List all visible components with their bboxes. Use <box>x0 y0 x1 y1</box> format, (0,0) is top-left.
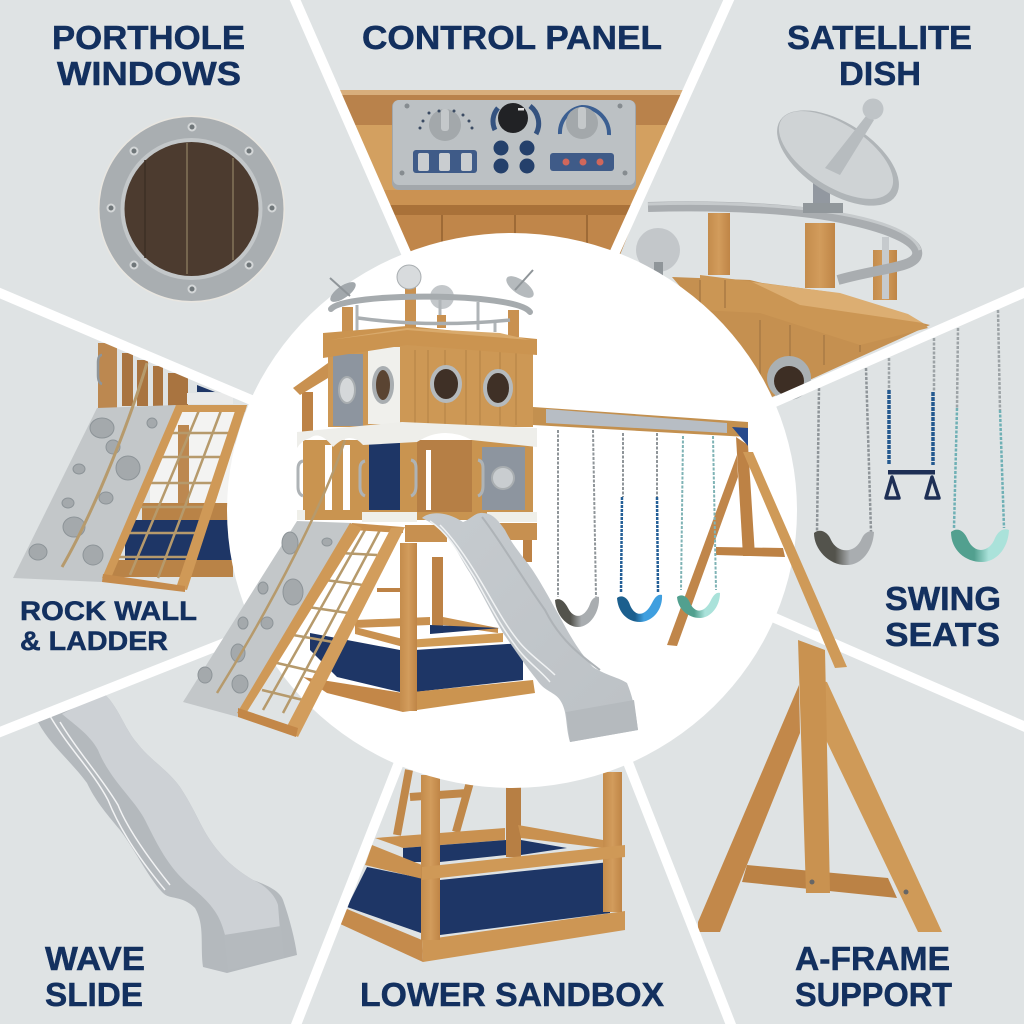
panel: a-frame support <box>698 640 952 1013</box>
rock wall <box>13 363 176 582</box>
heading: wave slide <box>45 940 145 1013</box>
heading: swing seats: SWING <box>885 580 1001 617</box>
center circle <box>227 233 797 788</box>
swing beam and a-frame <box>533 407 847 668</box>
heading: control panel: CONTROL PANEL <box>362 19 662 56</box>
trapeze bar <box>886 338 939 498</box>
heading: rock wall and ladder: & LADDER <box>20 626 168 656</box>
icon: control console <box>392 100 636 190</box>
heading: porthole windows: PORTHOLE <box>52 19 245 56</box>
swing 1 <box>555 430 599 627</box>
wood backing <box>338 90 686 260</box>
icon: slide <box>38 693 297 973</box>
heading: wave slide: WAVE <box>45 940 145 977</box>
net ladder <box>102 405 247 592</box>
posts and rail <box>648 203 920 300</box>
swing 3 <box>677 436 720 618</box>
heading: satellite dish <box>787 19 972 92</box>
heading: wave slide: SLIDE <box>45 976 143 1013</box>
icon: a-frame <box>698 640 942 932</box>
side roof <box>293 363 328 432</box>
swing 2 <box>617 433 662 622</box>
panel: lower sandbox <box>338 770 664 1013</box>
panel: satellite dish <box>636 19 972 400</box>
swing seat teal <box>951 310 1009 562</box>
tower behind wall <box>98 343 235 577</box>
heading: porthole windows: WINDOWS <box>57 55 241 92</box>
white band <box>297 422 537 448</box>
boat deck <box>672 275 930 398</box>
panel: rock wall and ladder <box>13 343 247 656</box>
playset illustration <box>183 265 847 742</box>
heading: a-frame support: SUPPORT <box>795 976 952 1013</box>
panel: wave slide <box>38 693 297 1013</box>
rock wall <box>183 440 352 717</box>
heading: swing seats: SEATS <box>885 616 1000 653</box>
heading: swing seats <box>885 580 1001 653</box>
panel: swing seats <box>814 310 1009 653</box>
sandbox and posts <box>303 523 537 712</box>
swing seat grey <box>814 368 874 565</box>
ball finial <box>636 228 680 278</box>
heading: lower sandbox: LOWER SANDBOX <box>360 976 664 1013</box>
porthole small <box>767 356 811 400</box>
cabin roof beam <box>323 326 537 358</box>
lower deck <box>297 440 537 522</box>
panel: control panel <box>338 19 686 260</box>
upper cabin <box>328 345 533 427</box>
heading: satellite dish: DISH <box>839 55 921 92</box>
heading: rock wall and ladder <box>20 596 197 656</box>
icon: porthole <box>98 116 285 302</box>
heading: satellite dish: SATELLITE <box>787 19 972 56</box>
heading: porthole windows <box>52 19 245 92</box>
icon: satellite dish <box>761 91 915 225</box>
heading: a-frame support <box>795 940 952 1013</box>
slide <box>422 513 638 742</box>
heading: rock wall and ladder: ROCK WALL <box>20 596 197 626</box>
icon: sandbox <box>338 770 625 962</box>
panel: porthole windows <box>52 19 285 302</box>
crow's nest <box>327 265 537 337</box>
heading: a-frame support: A-FRAME <box>795 940 950 977</box>
net ladder <box>237 523 405 737</box>
